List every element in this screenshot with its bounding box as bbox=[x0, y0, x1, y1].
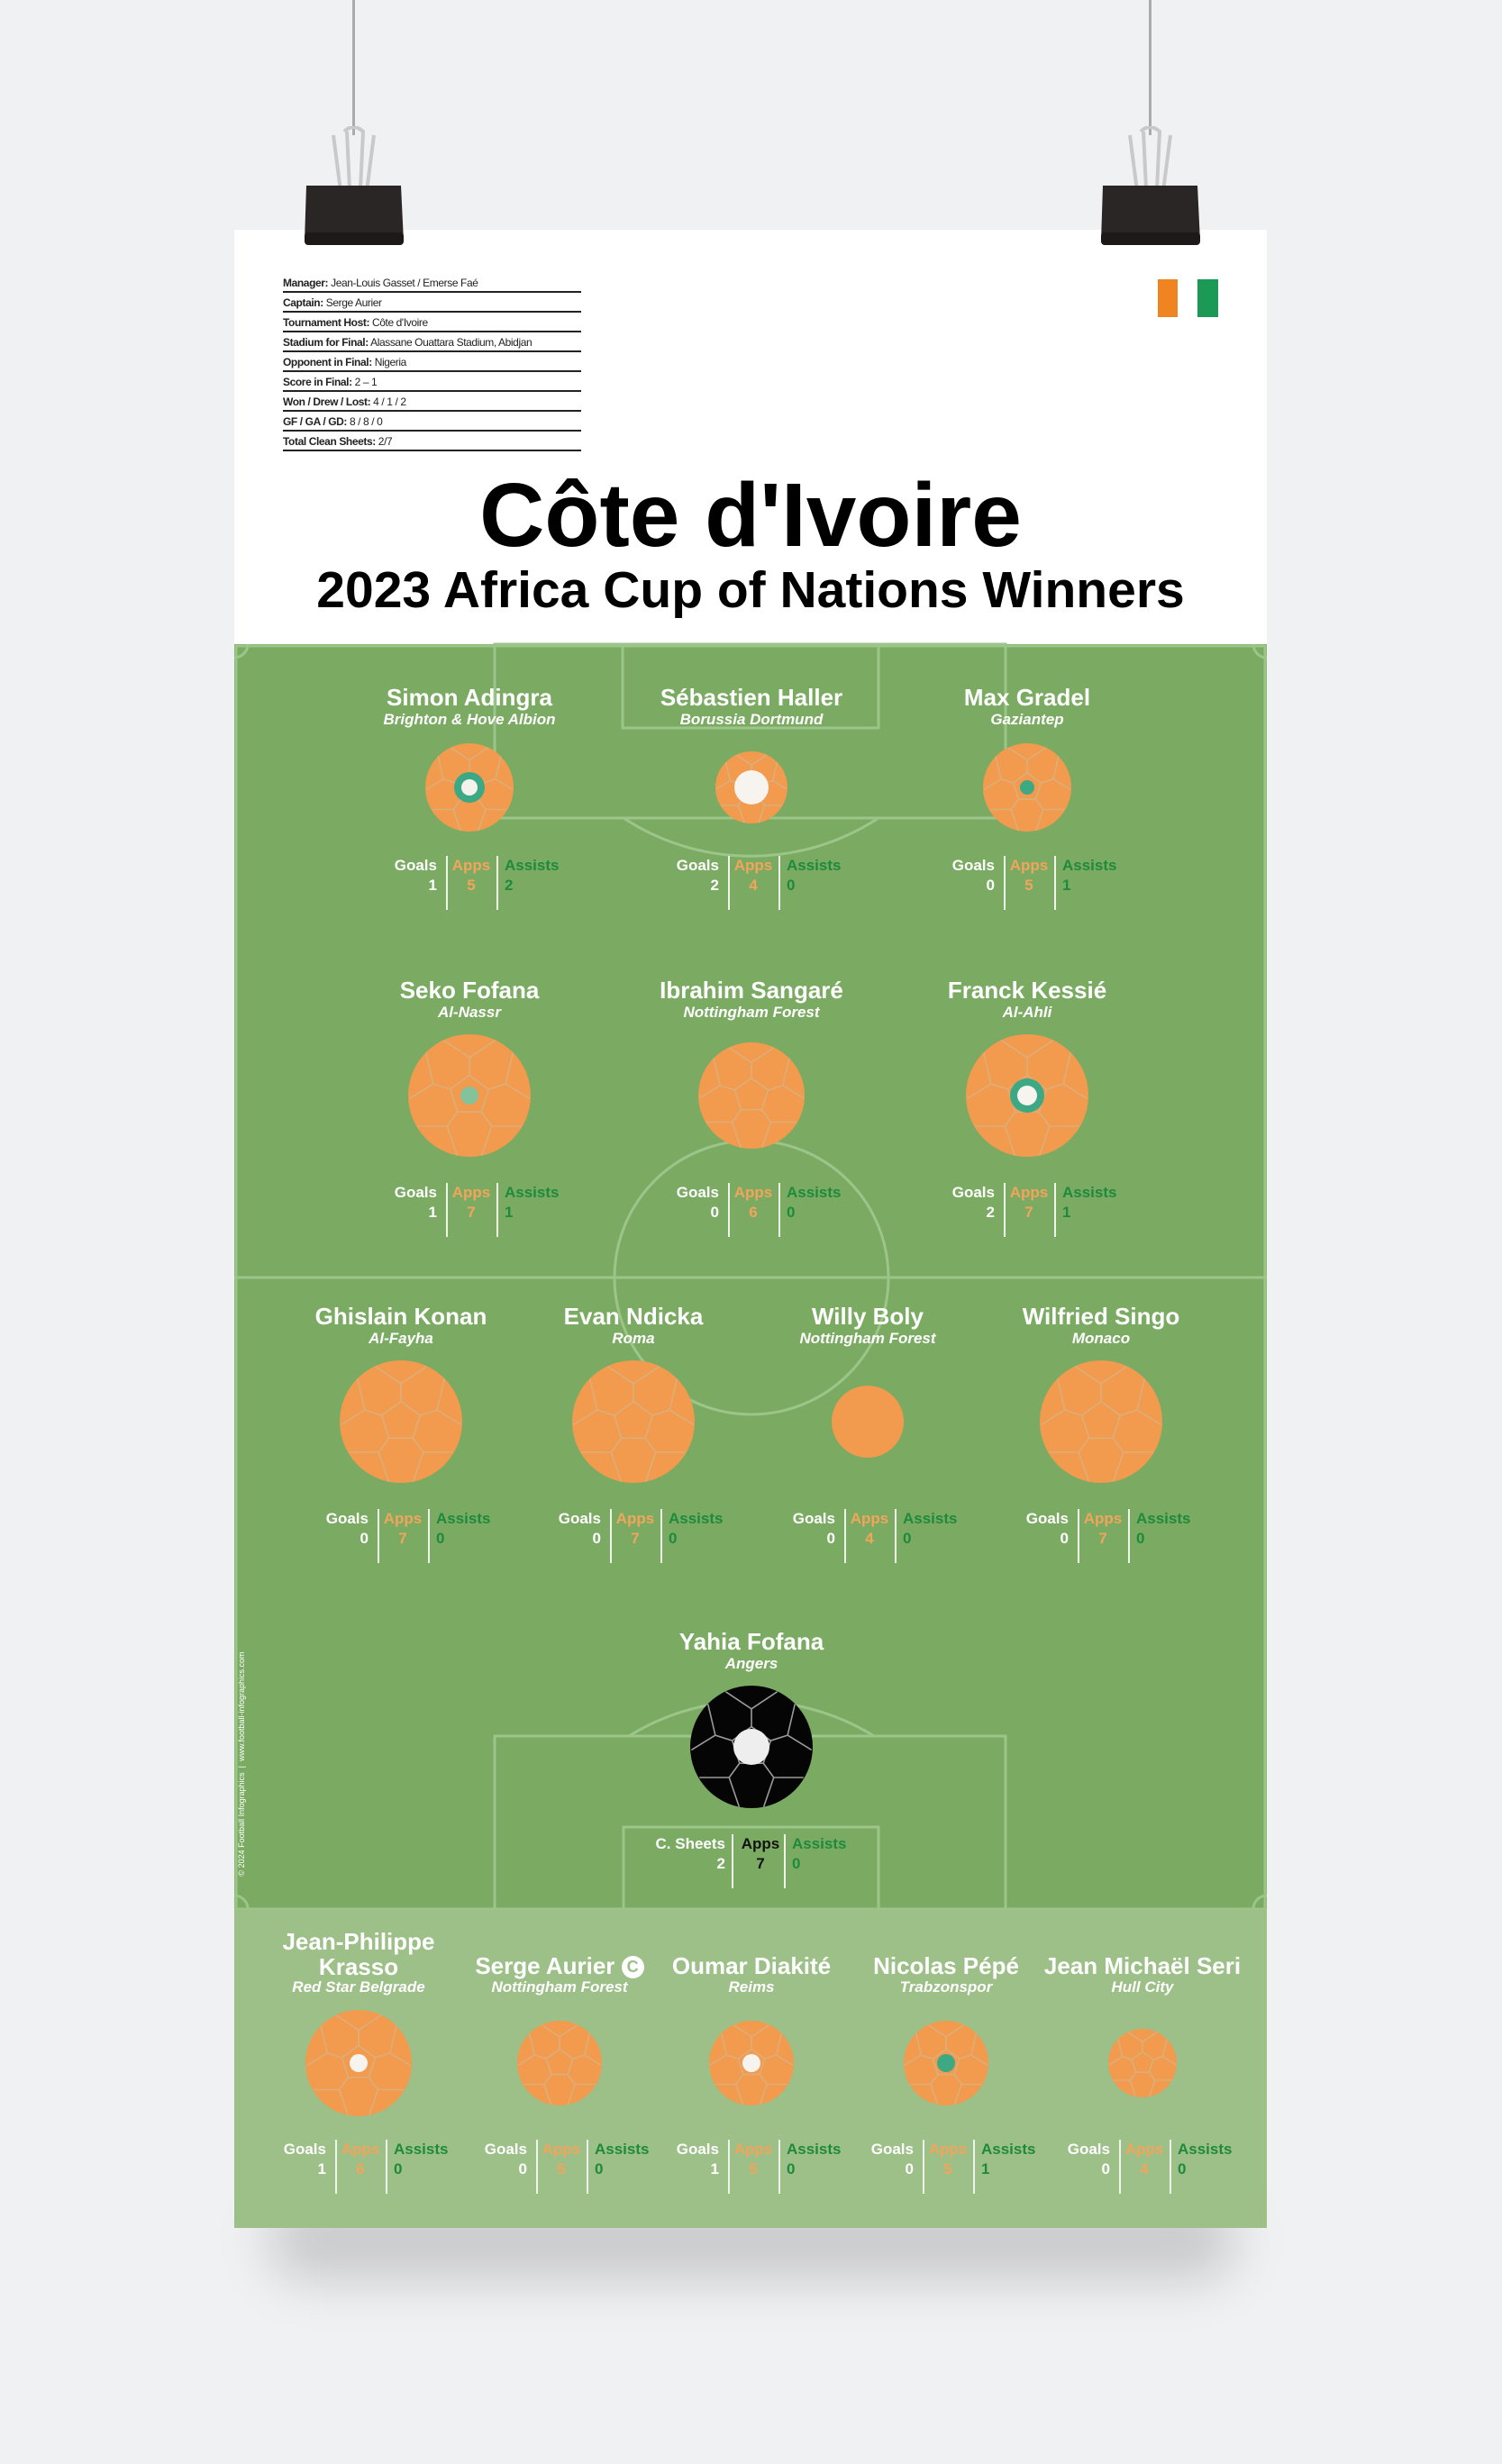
sub: Jean Michaël Seri: Goals bbox=[1068, 2141, 1110, 2158]
player: Ibrahim Sangaré: Ibrahim Sangaré bbox=[660, 977, 843, 1004]
ball: Diakité bbox=[709, 2021, 794, 2105]
player: Franck Kessié: Apps bbox=[1010, 1184, 1048, 1201]
player: Evan Ndicka: Goals bbox=[559, 1510, 601, 1527]
player: Ghislain Konan: Assists bbox=[436, 1510, 490, 1527]
player: Max Gradel: Goals bbox=[952, 857, 995, 874]
player: Simon Adingra: Brighton & Hove Albion bbox=[383, 711, 556, 728]
player: Franck Kessié: 7 bbox=[1024, 1204, 1033, 1221]
info table: Manager: Jean-Louis Gasset / Emerse Faé bbox=[283, 277, 478, 289]
player: Yahia Fofana (GK): 2 bbox=[717, 1855, 725, 1872]
player: Wilfried Singo: Assists bbox=[1136, 1510, 1190, 1527]
player: Yahia Fofana (GK): C. Sheets bbox=[656, 1835, 725, 1852]
player: Max Gradel: Apps bbox=[1010, 857, 1048, 874]
player: Simon Adingra: Assists bbox=[505, 857, 559, 874]
sub: Oumar Diakité: 5 bbox=[749, 2160, 758, 2178]
info table bbox=[283, 277, 581, 451]
sub: Jean Michaël Seri: Jean Michaël Seri bbox=[1044, 1952, 1241, 1979]
player: Simon Adingra: 2 bbox=[505, 877, 513, 894]
player: Ghislain Konan: Al-Fayha bbox=[369, 1330, 433, 1347]
info table: Captain: Serge Aurier bbox=[283, 296, 382, 309]
player: Simon Adingra: Goals bbox=[395, 857, 437, 874]
player: Franck Kessié: Assists bbox=[1062, 1184, 1116, 1201]
player: Willy Boly: 0 bbox=[903, 1530, 911, 1547]
player: Ghislain Konan: 0 bbox=[436, 1530, 444, 1547]
sub: Jean Michaël Seri: Assists bbox=[1178, 2141, 1232, 2158]
player: Max Gradel: Gaziantep bbox=[990, 711, 1064, 728]
player: Evan Ndicka: Evan Ndicka bbox=[564, 1303, 703, 1330]
sub: Nicolas Pépé: 1 bbox=[981, 2160, 989, 2178]
sub: Jean-Philippe Krasso: 6 bbox=[356, 2160, 365, 2178]
info table: Won / Drew / Lost: 4 / 1 / 2 bbox=[283, 396, 406, 408]
info table: GF / GA / GD: 8 / 8 / 0 bbox=[283, 415, 382, 428]
ball: Seri bbox=[1108, 2029, 1177, 2097]
sub: Oumar Diakité: Goals bbox=[677, 2141, 719, 2158]
sub: Serge Aurier: C bbox=[627, 1958, 639, 1976]
hanging wire right bbox=[1149, 0, 1152, 135]
player: Wilfried Singo: Goals bbox=[1026, 1510, 1069, 1527]
sub: Nicolas Pépé: Trabzonspor bbox=[900, 1978, 992, 1996]
player: Willy Boly: 0 bbox=[827, 1530, 835, 1547]
player: Wilfried Singo: Wilfried Singo bbox=[1023, 1303, 1179, 1330]
player: Willy Boly bbox=[793, 1303, 957, 1563]
sub: Nicolas Pépé: Apps bbox=[929, 2141, 967, 2158]
player: Willy Boly: Goals bbox=[793, 1510, 835, 1527]
info table: Score in Final: 2 – 1 bbox=[283, 376, 377, 388]
sub: Serge Aurier: 5 bbox=[557, 2160, 566, 2178]
sub: Nicolas Pépé: Goals bbox=[871, 2141, 914, 2158]
player: Seko Fofana: 1 bbox=[505, 1204, 513, 1221]
sub: Oumar Diakité bbox=[672, 1952, 841, 2194]
flag bbox=[1158, 279, 1218, 317]
sub: Serge Aurier bbox=[475, 1952, 649, 2194]
player: Evan Ndicka: Roma bbox=[612, 1330, 655, 1347]
sub: Oumar Diakité: Oumar Diakité bbox=[672, 1952, 831, 1979]
player: Franck Kessié: Goals bbox=[952, 1184, 995, 1201]
player: Max Gradel: Assists bbox=[1062, 857, 1116, 874]
player: Willy Boly: 4 bbox=[865, 1530, 874, 1547]
player: Max Gradel: Max Gradel bbox=[964, 684, 1090, 711]
player: Simon Adingra bbox=[383, 684, 559, 910]
player: Ghislain Konan: Ghislain Konan bbox=[315, 1303, 487, 1330]
title: Côte d'Ivoire bbox=[479, 465, 1022, 566]
player: Sébastien Haller: Apps bbox=[734, 857, 772, 874]
sub: Serge Aurier: Apps bbox=[542, 2141, 580, 2158]
player: Ibrahim Sangaré: Goals bbox=[677, 1184, 719, 1201]
player: Evan Ndicka: Apps bbox=[616, 1510, 654, 1527]
player: Willy Boly: Willy Boly bbox=[812, 1303, 924, 1330]
sub: Jean Michaël Seri: 0 bbox=[1178, 2160, 1186, 2178]
sub: Nicolas Pépé: 0 bbox=[906, 2160, 914, 2178]
player: Seko Fofana bbox=[395, 977, 559, 1237]
player: Seko Fofana: Apps bbox=[452, 1184, 490, 1201]
sub: Jean Michaël Seri: 4 bbox=[1140, 2160, 1149, 2178]
sub: Nicolas Pépé: Assists bbox=[981, 2141, 1035, 2158]
player: Max Gradel: 5 bbox=[1024, 877, 1033, 894]
player: Seko Fofana: Assists bbox=[505, 1184, 559, 1201]
player: Ibrahim Sangaré: 6 bbox=[749, 1204, 758, 1221]
clip right bbox=[1101, 126, 1200, 245]
player: Willy Boly: Assists bbox=[903, 1510, 957, 1527]
player: Seko Fofana: Goals bbox=[395, 1184, 437, 1201]
player: Evan Ndicka bbox=[559, 1303, 723, 1563]
player: Sébastien Haller: 0 bbox=[787, 877, 795, 894]
player: Willy Boly: Apps bbox=[851, 1510, 888, 1527]
ball: Krasso bbox=[305, 2010, 412, 2116]
player: Ghislain Konan: Apps bbox=[384, 1510, 422, 1527]
player: Seko Fofana: 7 bbox=[467, 1204, 476, 1221]
player: Wilfried Singo: 0 bbox=[1136, 1530, 1144, 1547]
player: Wilfried Singo: 7 bbox=[1098, 1530, 1107, 1547]
player: Willy Boly: Nottingham Forest bbox=[799, 1330, 936, 1347]
player: Yahia Fofana (GK): Apps bbox=[742, 1835, 779, 1852]
player: Sébastien Haller: Assists bbox=[787, 857, 841, 874]
player: Seko Fofana: Seko Fofana bbox=[400, 977, 539, 1004]
ball: Ndicka bbox=[572, 1360, 695, 1483]
sub: Jean Michaël Seri: 0 bbox=[1102, 2160, 1110, 2178]
sub: Nicolas Pépé: Nicolas Pépé bbox=[873, 1952, 1019, 1979]
info table: Total Clean Sheets: 2/7 bbox=[283, 435, 392, 448]
player: Sébastien Haller bbox=[660, 684, 842, 910]
ball: Yahia Fofana bbox=[690, 1686, 813, 1808]
sub: Oumar Diakité: 1 bbox=[711, 2160, 719, 2178]
sub: Jean-Philippe Krasso: Jean-Philippe bbox=[282, 1928, 435, 1955]
ball: Adingra bbox=[425, 743, 514, 832]
player: Simon Adingra: 1 bbox=[429, 877, 437, 894]
sub: Jean-Philippe Krasso bbox=[282, 1928, 448, 2194]
player: Yahia Fofana (GK): Angers bbox=[725, 1655, 778, 1672]
player: Ibrahim Sangaré: Nottingham Forest bbox=[683, 1004, 820, 1021]
player: Wilfried Singo: Monaco bbox=[1072, 1330, 1130, 1347]
player: Wilfried Singo: 0 bbox=[1061, 1530, 1069, 1547]
text: © 2024 Football Infographics | www.football-infographics.com bbox=[237, 1651, 246, 1877]
player: Sébastien Haller: 4 bbox=[749, 877, 758, 894]
subtitle: 2023 Africa Cup of Nations Winners bbox=[316, 561, 1185, 619]
ball: Boly bbox=[832, 1386, 904, 1458]
sub: Jean-Philippe Krasso: 1 bbox=[318, 2160, 326, 2178]
player: Yahia Fofana (GK): 7 bbox=[756, 1855, 765, 1872]
sub: Jean-Philippe Krasso: Red Star Belgrade bbox=[292, 1978, 425, 1996]
sub: Serge Aurier: Assists bbox=[595, 2141, 649, 2158]
player: Franck Kessié: Franck Kessié bbox=[948, 977, 1106, 1004]
sub: Jean-Philippe Krasso: Assists bbox=[394, 2141, 448, 2158]
sub: Nicolas Pépé bbox=[871, 1952, 1035, 2194]
sub: Jean-Philippe Krasso: Krasso bbox=[319, 1953, 398, 1980]
sub: Oumar Diakité: Assists bbox=[787, 2141, 841, 2158]
player: Sébastien Haller: 2 bbox=[711, 877, 719, 894]
player: Simon Adingra: 5 bbox=[467, 877, 476, 894]
player: Yahia Fofana (GK): Yahia Fofana bbox=[679, 1628, 824, 1655]
sub: Serge Aurier: Nottingham Forest bbox=[491, 1978, 628, 1996]
sub: Jean-Philippe Krasso: Goals bbox=[284, 2141, 326, 2158]
player: Wilfried Singo: Apps bbox=[1084, 1510, 1122, 1527]
player: Ibrahim Sangaré: Assists bbox=[787, 1184, 841, 1201]
ball: Sangaré bbox=[698, 1042, 805, 1149]
sub: Serge Aurier: Goals bbox=[485, 2141, 527, 2158]
player: Ibrahim Sangaré: 0 bbox=[711, 1204, 719, 1221]
player: Franck Kessié: 2 bbox=[987, 1204, 995, 1221]
player: Simon Adingra: Simon Adingra bbox=[387, 684, 552, 711]
sub: Nicolas Pépé: 5 bbox=[943, 2160, 952, 2178]
player: Evan Ndicka: Assists bbox=[669, 1510, 723, 1527]
ball: Seko Fofana bbox=[408, 1034, 531, 1157]
player: Evan Ndicka: 0 bbox=[593, 1530, 601, 1547]
player: Max Gradel: 0 bbox=[987, 877, 995, 894]
sub: Jean Michaël Seri: Apps bbox=[1125, 2141, 1163, 2158]
sub: Jean Michaël Seri bbox=[1044, 1952, 1241, 2194]
sub: Serge Aurier: Serge Aurier bbox=[475, 1952, 614, 1979]
info table: Tournament Host: Côte d'Ivoire bbox=[283, 316, 428, 329]
info table: Opponent in Final: Nigeria bbox=[283, 356, 406, 368]
ball: Kessié bbox=[966, 1034, 1088, 1157]
player: Max Gradel: 1 bbox=[1062, 877, 1070, 894]
player: Ghislain Konan bbox=[315, 1303, 490, 1563]
player: Sébastien Haller: Goals bbox=[677, 857, 719, 874]
player: Ghislain Konan: Goals bbox=[326, 1510, 369, 1527]
player: Simon Adingra: Apps bbox=[452, 857, 490, 874]
player: Franck Kessié: 1 bbox=[1062, 1204, 1070, 1221]
sub: Jean-Philippe Krasso: Apps bbox=[341, 2141, 379, 2158]
player: Evan Ndicka: 0 bbox=[669, 1530, 677, 1547]
ball: Haller bbox=[715, 751, 787, 823]
player: Yahia Fofana (GK): Assists bbox=[792, 1835, 846, 1852]
sub: Oumar Diakité: 0 bbox=[787, 2160, 795, 2178]
ball: Konan bbox=[340, 1360, 462, 1483]
sub: Oumar Diakité: Reims bbox=[728, 1978, 775, 1996]
player: Ibrahim Sangaré: Apps bbox=[734, 1184, 772, 1201]
player: Seko Fofana: Al-Nassr bbox=[438, 1004, 501, 1021]
poster white header bbox=[234, 230, 1267, 644]
player: Wilfried Singo bbox=[1022, 1303, 1190, 1563]
player: Ibrahim Sangaré: 0 bbox=[787, 1204, 795, 1221]
ball: Gradel bbox=[983, 743, 1071, 832]
player: Sébastien Haller: Borussia Dortmund bbox=[680, 711, 823, 728]
player: Ghislain Konan: 7 bbox=[398, 1530, 407, 1547]
player: Yahia Fofana (GK) bbox=[656, 1628, 846, 1888]
hanging wire left bbox=[352, 0, 355, 135]
player: Seko Fofana: 1 bbox=[429, 1204, 437, 1221]
player: Ghislain Konan: 0 bbox=[360, 1530, 369, 1547]
ball: Aurier bbox=[517, 2021, 602, 2105]
poster shadow bbox=[270, 2198, 1234, 2279]
player: Evan Ndicka: 7 bbox=[631, 1530, 640, 1547]
clip left bbox=[305, 126, 404, 245]
ball: Singo bbox=[1040, 1360, 1162, 1483]
sub: Jean Michaël Seri: Hull City bbox=[1112, 1978, 1173, 1996]
sub: Serge Aurier: 0 bbox=[519, 2160, 527, 2178]
ball: Pépé bbox=[904, 2021, 988, 2105]
sub: Serge Aurier: 0 bbox=[595, 2160, 603, 2178]
player: Ibrahim Sangaré bbox=[660, 977, 843, 1237]
sub: Jean-Philippe Krasso: 0 bbox=[394, 2160, 402, 2178]
player: Max Gradel bbox=[952, 684, 1116, 910]
player: Franck Kessié bbox=[948, 977, 1116, 1237]
player: Yahia Fofana (GK): 0 bbox=[792, 1855, 800, 1872]
sub: Oumar Diakité: Apps bbox=[734, 2141, 772, 2158]
player: Sébastien Haller: Sébastien Haller bbox=[660, 684, 842, 711]
info table: Stadium for Final: Alassane Ouattara Stadium, Abidjan bbox=[283, 336, 532, 349]
player: Franck Kessié: Al-Ahli bbox=[1003, 1004, 1051, 1021]
